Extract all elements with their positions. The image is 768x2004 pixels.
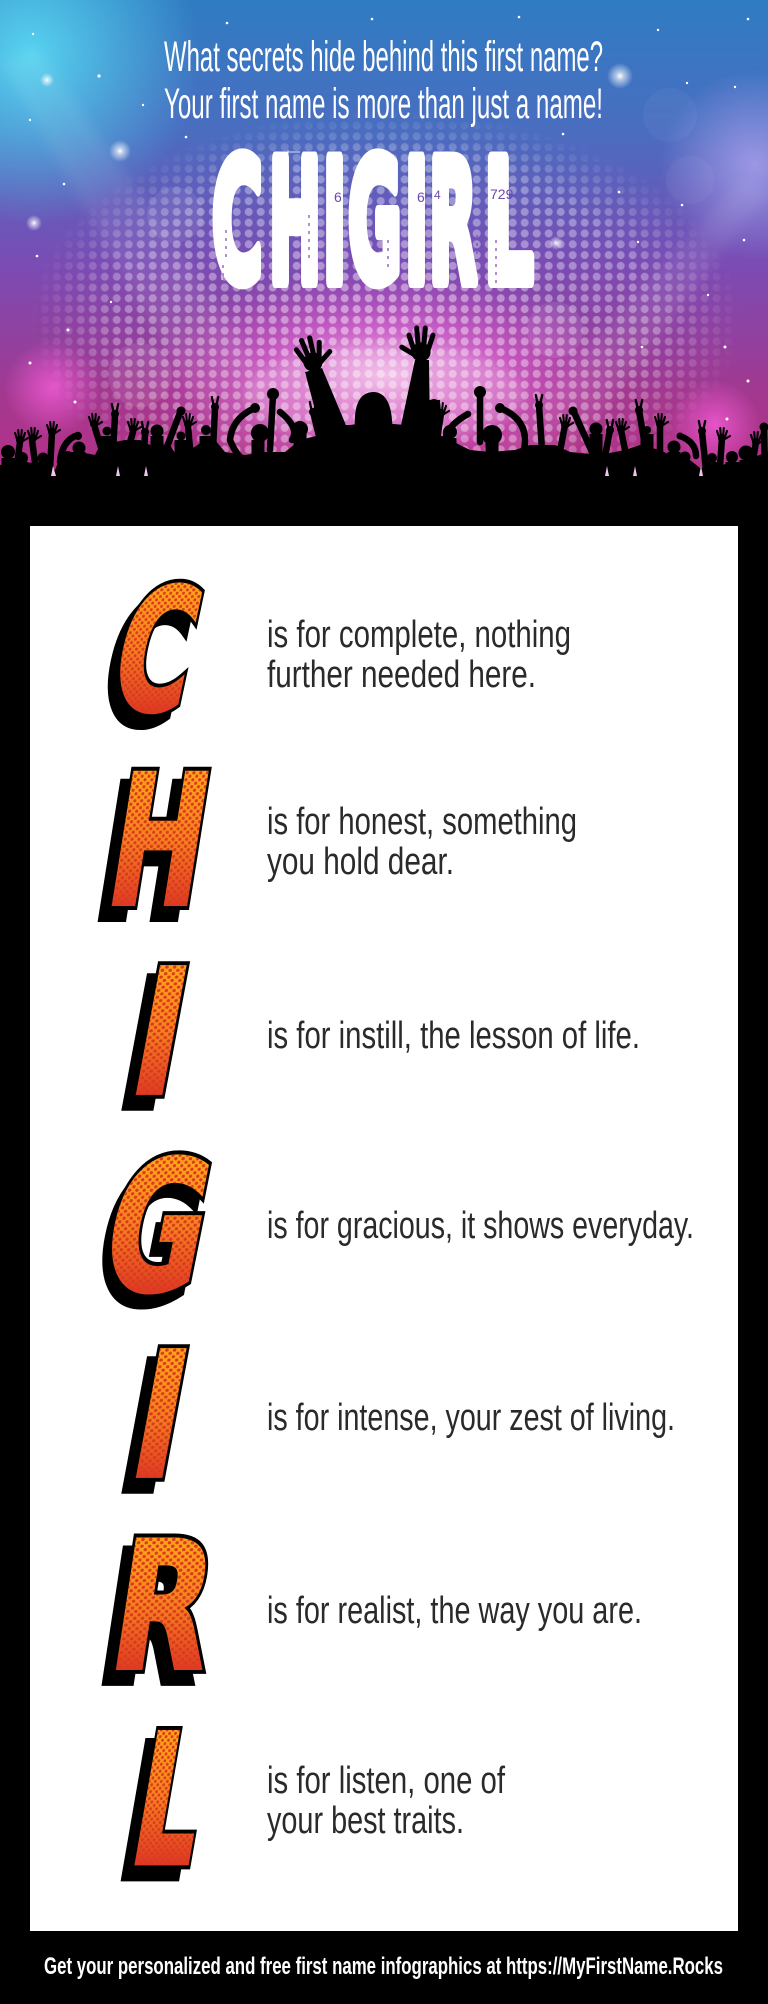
- text for R: is for realist, the way you are.: [267, 1590, 642, 1632]
- letter I second: I: [107, 1329, 192, 1530]
- sparkles: [26, 16, 750, 420]
- letter I second: I: [118, 1317, 203, 1518]
- heading: question lines: [164, 33, 603, 128]
- letter L: L: [121, 1698, 218, 1904]
- title: name CHIGIRL: 6: [334, 189, 342, 205]
- letter G: G: [81, 1135, 221, 1344]
- title: name CHIGIRL: [212, 124, 533, 321]
- letter L: L: [121, 1698, 218, 1904]
- text for C: further needed here.: [267, 654, 536, 696]
- letter G: G: [88, 1124, 228, 1333]
- text for L: is for listen, one of: [267, 1760, 505, 1802]
- letter R: R: [100, 1506, 228, 1710]
- title: name CHIGIRL: 6: [417, 189, 425, 205]
- row G: [81, 1124, 694, 1344]
- gaps in crowd: [51, 466, 703, 476]
- letter C: C: [97, 552, 216, 750]
- letter R: R: [89, 1518, 217, 1722]
- central figure: [294, 328, 450, 445]
- title: name CHIGIRL: 729: [490, 186, 514, 202]
- letter I second: I: [118, 1317, 203, 1518]
- letter H: H: [96, 737, 223, 947]
- letter G: G: [88, 1124, 228, 1333]
- title: name CHIGIRL: R: [429, 124, 477, 321]
- title: name CHIGIRL: I: [405, 124, 428, 321]
- letter R: R: [100, 1506, 228, 1710]
- crowd silhouette: [0, 328, 768, 530]
- row I: [107, 934, 640, 1147]
- letter I: I: [118, 934, 203, 1135]
- row R: [89, 1506, 642, 1722]
- title: name CHIGIRL: C: [212, 126, 263, 321]
- letter I second: I: [118, 1317, 203, 1518]
- letter R: R: [100, 1506, 228, 1710]
- row L: [110, 1698, 505, 1916]
- title: name CHIGIRL: L: [484, 126, 533, 321]
- letter H: H: [85, 749, 212, 959]
- title: name CHIGIRL: I: [323, 124, 346, 321]
- crowd arms: [16, 392, 765, 472]
- row I second: [107, 1317, 675, 1530]
- title: name CHIGIRL: H: [269, 124, 321, 321]
- row C: [87, 552, 571, 762]
- crowd bodies: [8, 434, 746, 478]
- crowd heads: [1, 421, 754, 464]
- crowd base: [0, 425, 768, 530]
- letter G: G: [88, 1124, 228, 1333]
- text for I: is for instill, the lesson of life.: [267, 1015, 640, 1057]
- text for H: is for honest, something: [267, 801, 577, 843]
- white content panel: [30, 526, 738, 1931]
- letter C: C: [97, 552, 216, 750]
- text for L: your best traits.: [267, 1800, 464, 1842]
- letter I: I: [118, 934, 203, 1135]
- letter H: H: [96, 737, 223, 947]
- text for C: is for complete, nothing: [267, 614, 571, 656]
- text for H: you hold dear.: [267, 841, 454, 883]
- crowd hands: [15, 386, 768, 446]
- letter C: C: [97, 552, 216, 750]
- title: name CHIGIRL: G: [348, 126, 402, 321]
- row H: [85, 737, 577, 959]
- letter C: C: [87, 564, 206, 762]
- letter I: I: [107, 946, 192, 1147]
- header background: [0, 0, 768, 470]
- letter H: H: [96, 737, 223, 947]
- letter L: L: [121, 1698, 218, 1904]
- title: name CHIGIRL: 4: [434, 188, 441, 202]
- letter I: I: [118, 934, 203, 1135]
- letter L: L: [110, 1710, 207, 1916]
